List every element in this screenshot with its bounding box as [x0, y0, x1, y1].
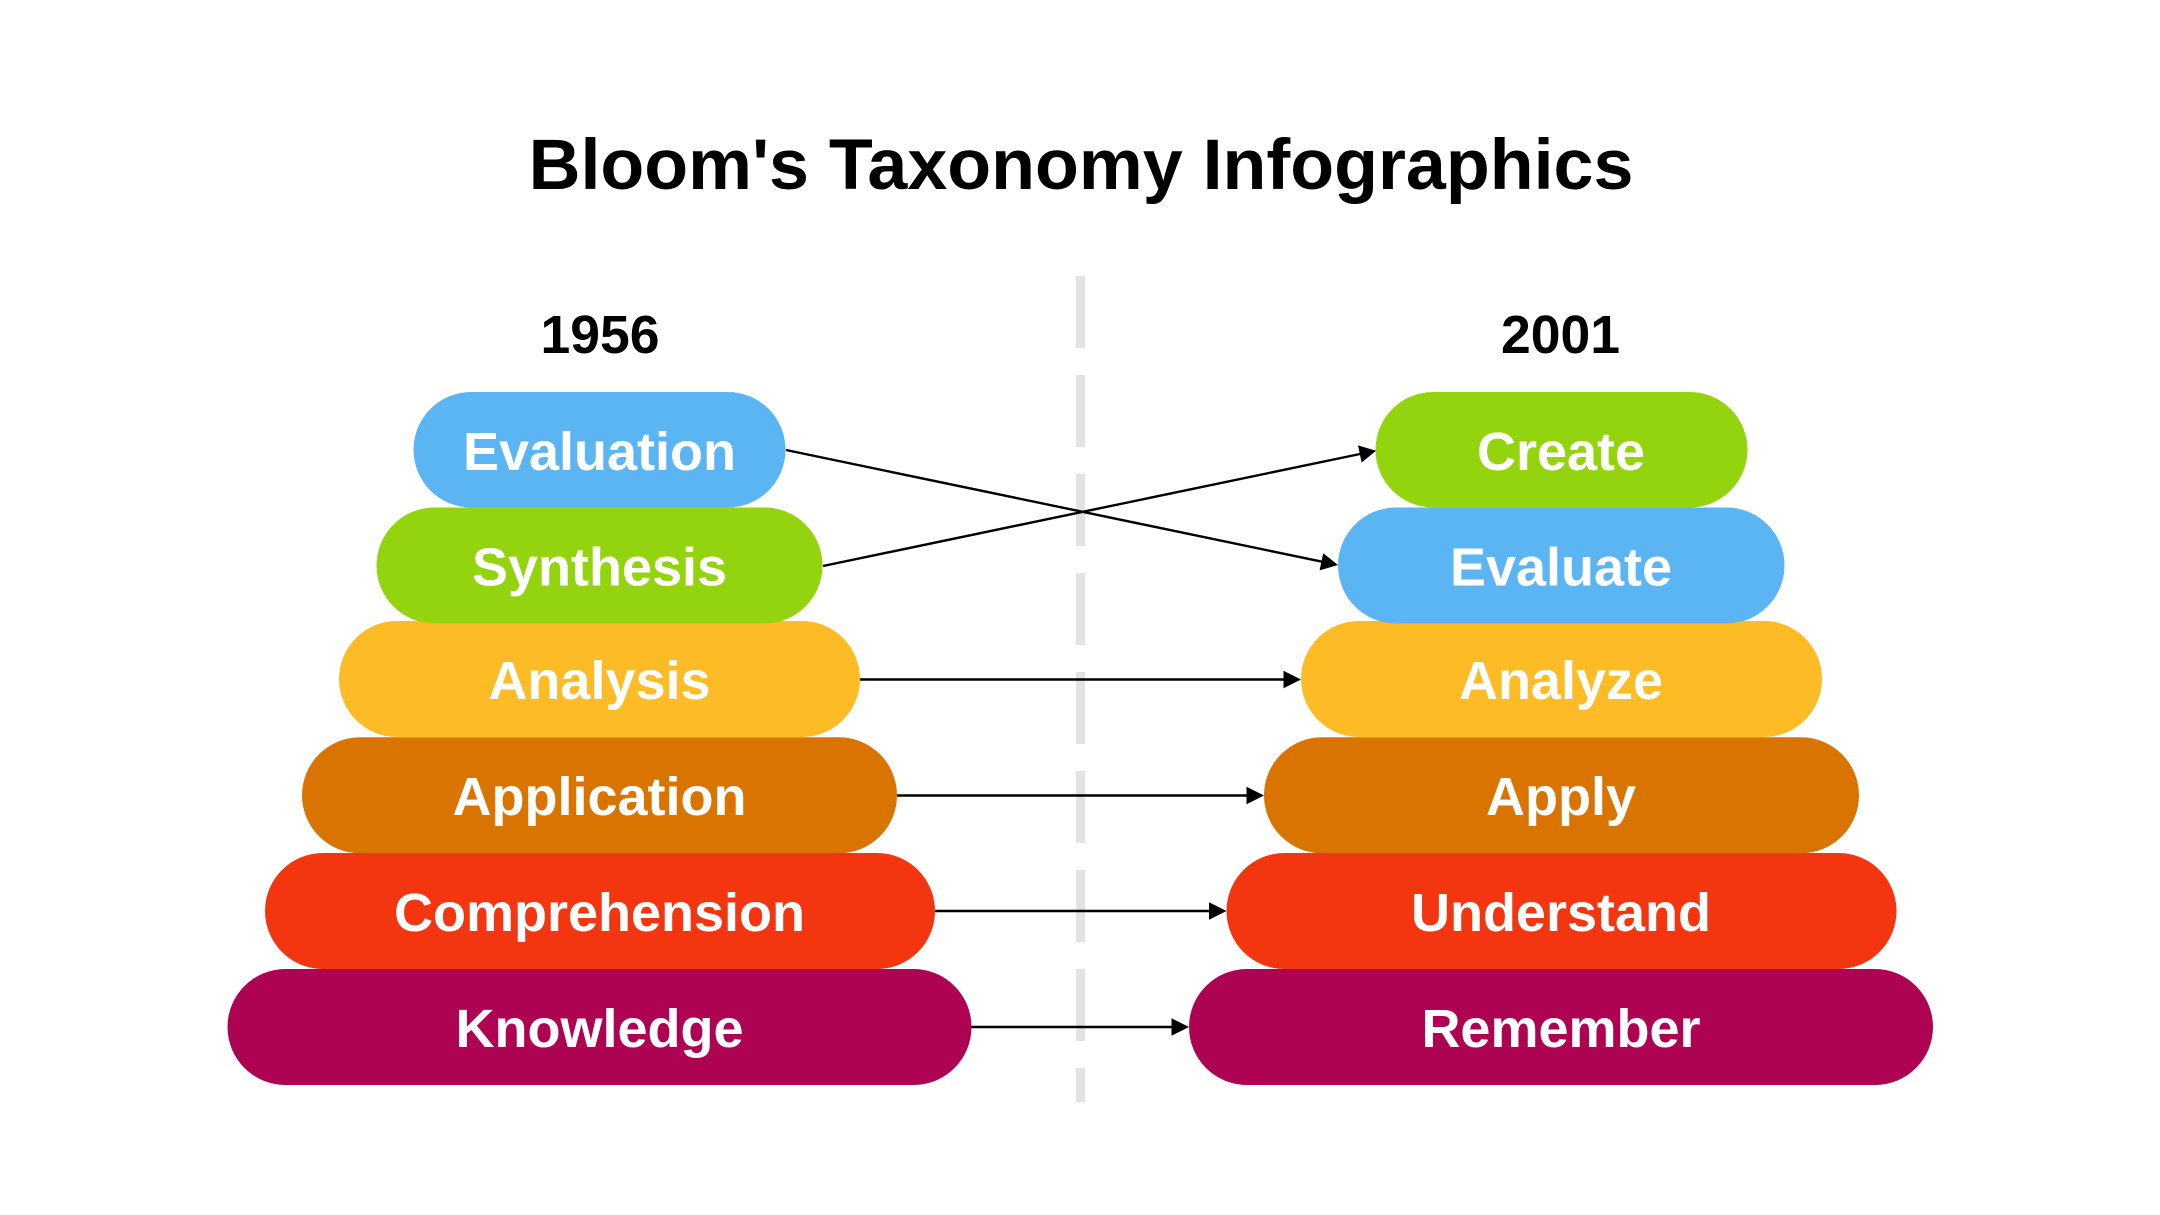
level: Comprehension: Comprehension: [394, 883, 805, 943]
level: Understand: Understand: [1411, 883, 1711, 943]
level: Create: Create: [1477, 422, 1645, 482]
pyramid: 2001 levels: [1189, 392, 1933, 1085]
level: Synthesis: Synthesis: [472, 538, 727, 598]
level: Evaluation: [414, 392, 786, 508]
level: Application: Application: [452, 767, 746, 827]
center dashed divider: [1076, 276, 1085, 1102]
level: Remember: Remember: [1421, 999, 1701, 1059]
level: Analyze: Analyze: [1459, 651, 1663, 711]
level: Create: [1376, 392, 1748, 508]
level: Evaluate: [1338, 508, 1784, 624]
arrow: Knowledge to Remember: [972, 1018, 1189, 1036]
arrow: Analysis to Analyze: [860, 671, 1301, 688]
level: Apply: Apply: [1486, 767, 1636, 827]
level: Understand: [1226, 853, 1896, 969]
level: Evaluation: Evaluation: [463, 422, 736, 482]
level: Knowledge: Knowledge: [455, 999, 744, 1059]
title: Bloom's Taxonomy Infographics: [529, 125, 1633, 205]
pyramid: 1956 levels: [228, 392, 972, 1085]
arrow: Application to Apply: [897, 787, 1264, 804]
level: Synthesis: [376, 508, 822, 624]
level: Remember: [1189, 969, 1933, 1085]
level: Apply: [1264, 737, 1859, 853]
level: Analyze: [1301, 621, 1822, 737]
level: Analysis: [339, 621, 860, 737]
arrow: Evaluation to Evaluate: [786, 450, 1338, 570]
heading: 1956: 1956: [540, 306, 660, 365]
level: Evaluate: Evaluate: [1450, 538, 1672, 598]
level: Knowledge: [228, 969, 972, 1085]
heading: 2001: 2001: [1501, 306, 1620, 365]
level: Application: [302, 737, 897, 853]
level: Comprehension: [265, 853, 935, 969]
arrow: Comprehension to Understand: [935, 902, 1226, 920]
level: Analysis: Analysis: [488, 651, 711, 711]
arrow: Synthesis to Create: [823, 445, 1376, 566]
